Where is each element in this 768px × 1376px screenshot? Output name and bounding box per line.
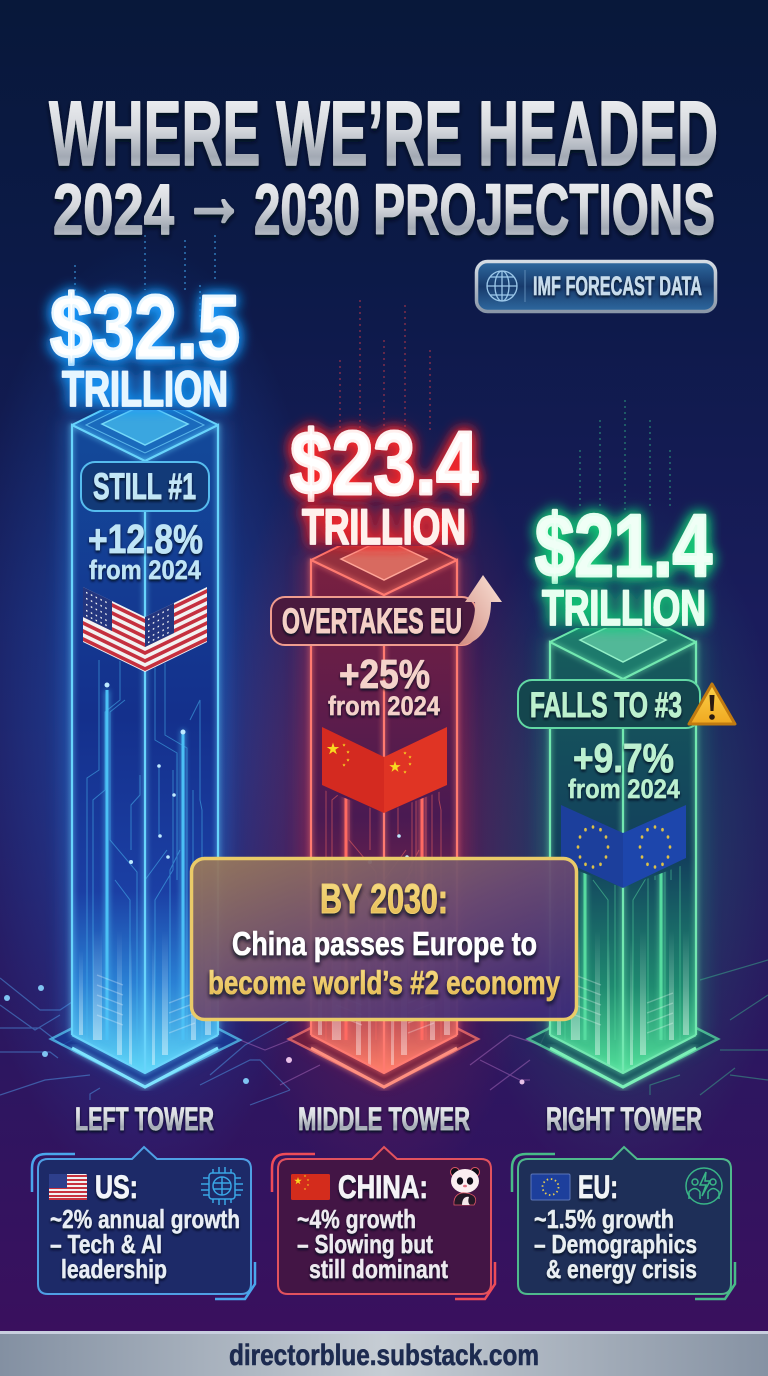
- stat: +25% from 2024: from 2024: [328, 691, 440, 721]
- text: EU growth: [534, 1204, 697, 1284]
- text: China growth: – Slowing but: [297, 1229, 433, 1259]
- title: [49, 83, 718, 250]
- icon: warning triangle: [689, 684, 735, 724]
- flag: EU chevron: [561, 805, 686, 888]
- flag: US chevron: [83, 587, 207, 672]
- tower ambient glows: [0, 240, 768, 1200]
- tower labels: LEFT TOWER: [75, 1101, 214, 1137]
- tower base: US: [51, 991, 240, 1087]
- value: China $23.4 trillion: TRILLION: [302, 499, 466, 555]
- text: China growth: ~4% growth: [297, 1204, 416, 1234]
- icon: small China flag: [291, 1174, 330, 1200]
- footer bar: [0, 1331, 768, 1376]
- icon: small US flag: [49, 1174, 87, 1200]
- tower labels: [75, 1101, 702, 1137]
- icon: panda: [450, 1168, 480, 1205]
- text: EU growth: ~1.5% growth: [534, 1204, 674, 1234]
- badge: IMF forecast data: [476, 262, 716, 312]
- tower labels: RIGHT TOWER: [546, 1101, 702, 1137]
- pill: falls to #3: FALLS TO #3: [530, 686, 682, 725]
- text: China growth: still dominant: [309, 1254, 448, 1284]
- tower base: EU: [528, 991, 718, 1087]
- text: EU growth: & energy crisis: [546, 1254, 697, 1284]
- panel: US: US:: [95, 1169, 138, 1205]
- stat: +12.8% from 2024: from 2024: [89, 555, 201, 585]
- value: US $32.5 trillion: $32.5: [50, 278, 240, 378]
- flag: China chevron: [322, 727, 447, 813]
- value: EU $21.4 trillion: [535, 496, 712, 636]
- title: →: [182, 146, 246, 246]
- icon: AI chip: [201, 1167, 243, 1205]
- arrow: rising: [458, 575, 502, 645]
- tower: US: [51, 389, 240, 1087]
- icon: small EU flag: [531, 1174, 570, 1200]
- icon: demographics and energy: [686, 1168, 722, 1204]
- text: China growth: [297, 1204, 448, 1284]
- panel: China: [272, 1147, 495, 1299]
- pill: overtakes EU: [271, 597, 476, 645]
- tower: EU: [528, 606, 718, 1087]
- tower: China: [289, 524, 478, 1087]
- panel: EU: EU:: [578, 1169, 618, 1205]
- callout: by 2030: China passes Europe to: [232, 925, 537, 962]
- callout: by 2030: BY 2030:: [320, 875, 448, 922]
- value: EU $21.4 trillion: TRILLION: [542, 580, 706, 636]
- stat: +25% from 2024: +25%: [339, 651, 430, 697]
- dotted data streams above towers: [75, 235, 670, 510]
- text: US growth: leadership: [61, 1254, 167, 1284]
- background circuit traces: [0, 960, 768, 1105]
- panel: US: [32, 1147, 255, 1299]
- pill: still #1: [81, 462, 209, 511]
- pill: still #1: STILL #1: [93, 466, 196, 507]
- pill: overtakes EU: OVERTAKES EU: [282, 602, 462, 641]
- value: China $23.4 trillion: [290, 414, 478, 555]
- text: US growth: [50, 1204, 240, 1284]
- stat: +12.8% from 2024: +12.8%: [88, 516, 203, 562]
- value: China $23.4 trillion: $23.4: [290, 414, 478, 514]
- icon: globe: [487, 271, 517, 301]
- stat: +12.8% from 2024: [88, 516, 203, 585]
- stat: +9.7% from 2024: from 2024: [568, 774, 680, 804]
- stat: +9.7% from 2024: [568, 735, 680, 804]
- text: EU growth: – Demographics: [534, 1229, 697, 1259]
- panel: China: CHINA:: [338, 1169, 428, 1205]
- pill: falls to #3: [518, 680, 700, 728]
- tower labels: MIDDLE TOWER: [298, 1101, 470, 1137]
- value: US $32.5 trillion: TRILLION: [62, 361, 228, 417]
- value: US $32.5 trillion: [50, 278, 240, 417]
- value: EU $21.4 trillion: $21.4: [535, 496, 712, 595]
- stat: +25% from 2024: [328, 651, 440, 721]
- text: US growth: – Tech & AI: [50, 1229, 162, 1259]
- title: 2024: [53, 171, 174, 250]
- footer bar: directorblue.substack.com: [229, 1339, 539, 1372]
- panel: EU: [512, 1147, 735, 1299]
- text: US growth: ~2% annual growth: [50, 1204, 240, 1234]
- callout: by 2030: [192, 858, 576, 1020]
- callout: by 2030: become world’s #2 economy: [208, 964, 560, 1001]
- stat: +9.7% from 2024: +9.7%: [573, 735, 674, 781]
- tower base: China: [289, 991, 478, 1087]
